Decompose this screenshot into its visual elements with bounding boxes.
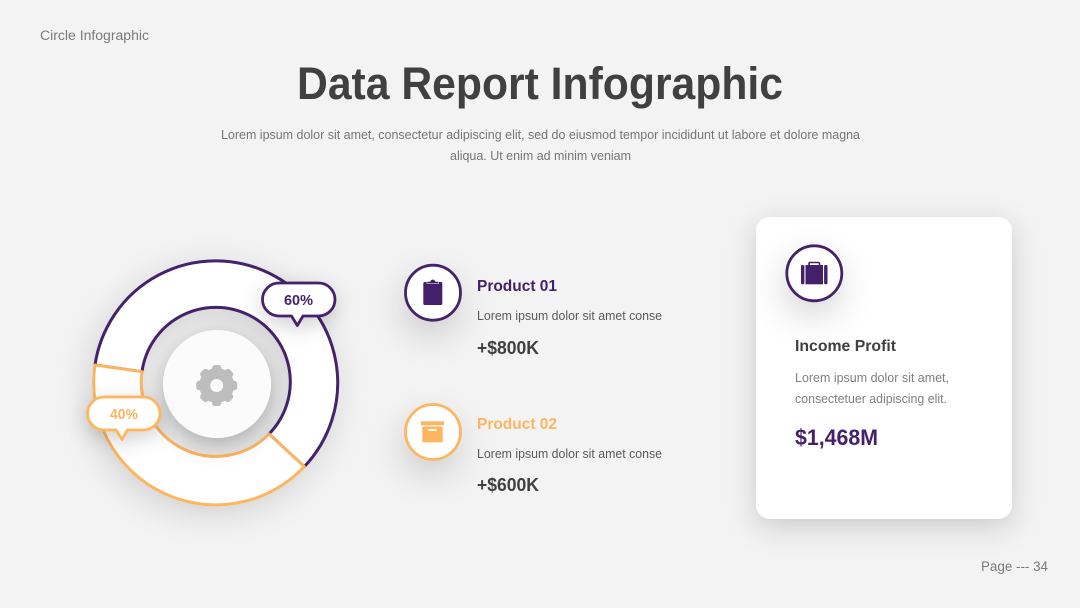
panel: income profit — [756, 217, 1012, 519]
callout: 40%: 40% — [110, 407, 138, 423]
product 02 — [406, 404, 662, 495]
value: $1,468M — [795, 425, 878, 450]
icon: gear — [196, 365, 237, 406]
donut rings — [94, 261, 338, 505]
description: Lorem ipsum dolor sit amet conse — [477, 308, 662, 323]
segment: 60% purple — [95, 261, 338, 467]
heading: Income Profit — [795, 338, 897, 355]
product 01 — [406, 265, 662, 358]
center circle — [163, 330, 271, 438]
callout: 60% — [263, 283, 335, 326]
description: Lorem ipsum dolor sit amet conse — [477, 446, 662, 461]
subtitle — [221, 127, 861, 163]
icon: briefcase — [787, 246, 842, 301]
value: +$800K — [477, 338, 539, 358]
description: consectetuer adipiscing elit. — [795, 391, 947, 406]
value: +$600K — [477, 475, 539, 495]
icon: box — [406, 404, 460, 460]
callout: 40% — [88, 397, 160, 440]
description — [795, 370, 949, 406]
page number: Page --- 34 — [981, 559, 1048, 574]
card — [756, 217, 1012, 519]
subtitle: aliqua. Ut enim ad minim veniam — [450, 148, 631, 163]
heading: Product 02 — [477, 416, 557, 433]
icon: clipboard — [406, 265, 460, 320]
description: Lorem ipsum dolor sit amet, — [795, 370, 949, 385]
callout: 60%: 60% — [284, 293, 313, 309]
donut chart — [88, 261, 338, 505]
title: Data Report Infographic — [297, 58, 783, 109]
segment: 40% orange — [94, 365, 304, 505]
subtitle: Lorem ipsum dolor sit amet, consectetur adipiscing elit, sed do eiusmod tempor incididunt ut labore et dolore magna — [221, 127, 861, 142]
heading: Product 01 — [477, 278, 557, 295]
section label: Circle Infographic — [40, 28, 149, 43]
